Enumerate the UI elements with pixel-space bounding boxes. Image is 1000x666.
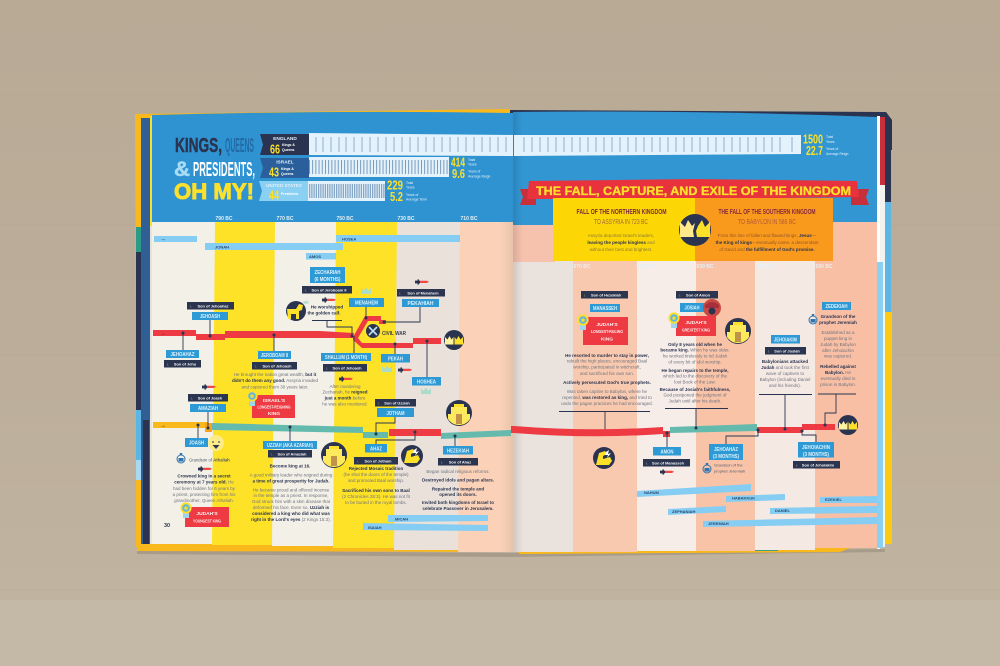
chart: kingdom of Israel timeline: → — [160, 331, 166, 337]
panel: left page timeline columns — [152, 222, 514, 552]
king: Joash: a priest, protecting him from his — [173, 492, 236, 497]
king: Amon — [643, 432, 690, 475]
icon: broken crown circle — [679, 214, 711, 246]
king: Ahaz: (2 Chronicles 28:3). He was not fit — [342, 494, 411, 499]
England totals: 1500 — [803, 132, 823, 146]
England totals — [803, 132, 848, 158]
icon: golden calf circle — [286, 300, 308, 321]
chart: kingdom of Judah timeline, right — [514, 424, 835, 437]
king: Josiah: JOSIAH — [684, 306, 700, 312]
king: Ahaz: Sacrificed his own sons to Baal — [342, 488, 410, 493]
icon: flexed arm, Manasseh — [593, 447, 615, 469]
king: Uzziah: Son of Amaziah — [277, 451, 307, 456]
king: Shallum: After murdering — [329, 384, 361, 389]
Israel reign bar — [309, 157, 449, 177]
Israel stat ribbon: Kings & — [281, 167, 294, 171]
chart: kingdom of Judah timeline, left — [153, 412, 514, 439]
United States term bar — [308, 181, 385, 201]
icon: crowns circle, end of Judah — [838, 415, 858, 435]
United States totals: Years — [406, 186, 415, 190]
king: Manasseh: Son of Hezekiah — [591, 292, 622, 297]
callout: Judah's longest-ruling king — [577, 314, 628, 345]
king: Hezekiah: opened its doors. — [439, 492, 477, 497]
king: Jehoiakim: JEHOIAKIM — [774, 338, 797, 344]
Israel totals: Average Reign — [468, 174, 490, 178]
king: Hezekiah: celebrate Passover in Jerusalem. — [422, 506, 494, 511]
king: Joash: grandmother, Queen Athaliah. — [174, 498, 234, 503]
king: Joash: Grandson of Athaliah — [189, 458, 230, 462]
king: Jehoiakim: ↓ — [768, 348, 770, 354]
king: Amaziah: AMAZIAH — [198, 406, 218, 412]
chart: prophet bars bottom left: MICAH — [395, 516, 408, 522]
king: Shallum: ↓ — [326, 366, 328, 370]
king: Zedekiah: Established as a — [821, 330, 855, 335]
callout: Judah's youngest king: YOUNGEST KING — [193, 518, 221, 524]
panel: fall of the northern kingdom: TO ASSYRIA IN 723 BC — [594, 217, 648, 226]
king: Jehoahaz of Judah: (3 MONTHS) — [713, 454, 739, 460]
king: Ahaz: ↓ — [357, 458, 359, 464]
panel: left page header — [152, 112, 514, 225]
banner: The Fall, Capture, and Exile of the Kingdom: THE FALL, CAPTURE, AND EXILE OF THE KINGDOM — [536, 184, 851, 198]
king: Ahaz: and promoted Baal worship. — [348, 478, 404, 483]
king: Zedekiah: puppet king in — [824, 336, 853, 341]
text: Josiah: Judah until after his death. — [669, 398, 721, 404]
chart: prophet bars top left: → — [160, 237, 166, 243]
England bar continued — [514, 135, 801, 156]
Israel totals — [451, 156, 490, 181]
panel: fall of the southern kingdom: TO BABYLON IN 586 BC — [738, 217, 796, 226]
left page years axis: 710 BC — [461, 216, 478, 222]
icon: civil war — [366, 324, 406, 338]
king: Jehoash of Israel: JEHOASH — [200, 314, 220, 320]
England totals: Years of — [826, 147, 838, 151]
king: Amon: ↓ — [646, 460, 648, 466]
right page years axis: 630 BC — [697, 264, 714, 270]
king: Hezekiah: ↓ — [441, 460, 443, 464]
chart: prophet bars top left: HOSEA — [342, 236, 356, 242]
callout: Judah's longest-ruling king: KING — [601, 336, 613, 342]
king: Hoshea — [412, 340, 441, 394]
England totals: Average Reign — [826, 152, 848, 156]
king: Zedekiah: ZEDEKIAH — [826, 304, 848, 310]
England stat ribbon: 66 — [270, 142, 280, 156]
England stat ribbon: Kings & — [282, 143, 295, 147]
text: Josiah: Only 8 years old when he — [668, 342, 722, 347]
king: Jehoash of Israel — [187, 302, 234, 338]
king: Jehoahaz of Israel: Son of Jehu — [174, 361, 197, 366]
icon: civil war: CIVIL WAR — [382, 331, 406, 337]
chart: kingdom of Israel timeline — [153, 316, 441, 348]
king: Pekah: PEKAH — [388, 356, 403, 362]
text: Manasseh: Was taken captive to Babylon, where he — [567, 389, 648, 394]
king: Hoshea: HOSHEA — [417, 380, 437, 386]
text: Manasseh: repented, was restored as king, and tried to — [562, 395, 652, 400]
king: Jehoiakim: wave of captives to — [766, 371, 805, 376]
England stat ribbon — [260, 134, 309, 156]
king: Ahaz: Rejected Mosaic tradition — [349, 466, 404, 471]
chart: prophet bars bottom right — [637, 484, 877, 527]
left page years axis: 730 BC — [398, 216, 415, 222]
text: Josiah: of every bit of idol worship. — [668, 360, 722, 364]
Israel stat ribbon: 43 — [269, 166, 279, 180]
king: Jehoiachin: Son of Jehoiakim — [802, 462, 835, 467]
king: Zedekiah: was captured. — [824, 354, 852, 358]
England stat ribbon: ENGLAND — [273, 136, 297, 142]
king: Jehoiakim: Babylonians attacked — [762, 359, 808, 364]
United States totals — [387, 178, 427, 204]
king: Amon: AMON — [660, 450, 674, 456]
king: Joash: had been hidden for 6 years by — [173, 486, 236, 491]
title: Kings, Queens & Presidents, Oh My!: OH MY! — [174, 179, 254, 204]
text: Manasseh: He resorted to murder to stay in power, — [565, 353, 649, 358]
king: Jotham — [374, 399, 416, 436]
king: Zechariah: Son of Jeroboam II — [311, 287, 347, 292]
panel: fall of the northern kingdom: leaving the people kingless and — [587, 240, 655, 245]
king: Shallum: Zechariah, he reigned — [322, 390, 368, 394]
Israel totals: Years — [468, 162, 477, 166]
chart: prophet bars top left: AMOS — [309, 254, 321, 259]
callout: Judah's longest-ruling king: JUDAH'S — [596, 322, 618, 328]
king: Jehoash of Israel: Son of Jehoahaz — [198, 303, 229, 308]
icon: temple, Jotham — [446, 400, 472, 426]
England totals: Total — [826, 135, 833, 139]
text: Josiah: He began repairs to the temple, — [661, 368, 729, 373]
icon: dagger near Zechariah — [322, 297, 336, 303]
king: Uzziah: A good military leader who reigned during — [250, 472, 333, 478]
king: Jotham: ↓ — [378, 400, 380, 406]
king: Jotham: JOTHAM — [386, 411, 405, 417]
chart: prophet bars top left: JONAH — [215, 244, 229, 250]
text: Josiah: which led to the discovery of the — [663, 374, 728, 378]
king: Jeroboam II: didn't do them any good. Assyria invaded — [232, 378, 319, 383]
king: Jeroboam II: and captured them 30 years later. — [241, 384, 309, 390]
king: Josiah — [676, 291, 721, 317]
right page years axis: 650 BC — [637, 264, 654, 270]
king: Manasseh: MANASSEH — [593, 306, 617, 312]
king: Uzziah: He became proud and offered incense — [253, 488, 330, 492]
king: Jehoiachin — [793, 430, 840, 468]
chart: prophet bars bottom right: DANIEL — [775, 508, 790, 513]
callout: Judah's longest-ruling king: LONGEST-RULING — [591, 329, 623, 335]
right page years axis: 670 BC — [574, 264, 591, 270]
chart: prophet bars bottom left — [363, 515, 488, 531]
king: Uzziah: UZZIAH (AKA AZARIAH) — [267, 443, 313, 449]
king: Jehoahaz of Israel — [164, 332, 201, 368]
king: Zedekiah: after Jehoiachin — [822, 348, 854, 353]
icon: crowns circle, end of Israel — [444, 330, 464, 350]
king: Jehoiakim: Babylon (including Daniel — [760, 377, 810, 382]
left page years axis: 790 BC — [216, 216, 233, 222]
king: Shallum: SHALLUM (1 MONTH) — [325, 355, 367, 361]
text: Josiah: lost Book of the Law. — [674, 380, 716, 384]
United States totals: Years of — [406, 193, 418, 197]
callout: Israel's longest-reigning king: LONGEST-REIGNING — [258, 404, 291, 410]
king: Joash: ceremony at 7 years old. He — [174, 480, 234, 484]
king: Menahem: MENAHEM — [355, 301, 378, 307]
king: Zechariah — [302, 267, 352, 294]
king: Jeroboam II: ↓ — [255, 364, 257, 368]
chart: prophet bars bottom right: EZEKIEL — [825, 497, 842, 502]
king: Zechariah: ↓ — [305, 288, 307, 292]
king: Ahaz — [342, 430, 416, 505]
king: Zedekiah: prophet Jeremiah — [819, 320, 857, 325]
king: Jehoahaz of Israel: ↓ — [167, 362, 169, 366]
chart: prophet bars bottom right: HABAKKUK — [732, 496, 755, 500]
text: Manasseh: undo the pagan practices he had encouraged. — [561, 401, 653, 406]
chart: prophet bars bottom right: ZEPHANIAH — [672, 509, 695, 514]
panel: left page header: PRESIDENTS, — [193, 159, 255, 181]
king: Jehoahaz of Israel: JEHOAHAZ — [170, 352, 195, 358]
king: Hezekiah: HEZEKIAH — [447, 448, 469, 454]
callout: Israel's longest-reigning king — [246, 390, 295, 418]
callout: Israel's longest-reigning king: ISRAEL'S — [263, 398, 286, 404]
left page years axis: 750 BC — [337, 216, 354, 222]
panel: fall of the northern kingdom: FALL OF THE NORTHERN KINGDOM — [576, 207, 666, 216]
United States totals: 229 — [387, 178, 403, 192]
king: Uzziah — [250, 426, 333, 522]
left page years axis: 770 BC — [277, 216, 294, 222]
text: Josiah: Because of Josiah's faithfulness, — [660, 387, 730, 392]
panel: fall of the northern kingdom: without their best and brightest. — [590, 247, 652, 252]
Israel totals: Years of — [468, 170, 480, 174]
book: covers and page edges — [135, 109, 892, 554]
king: Jehoiachin: ↓ — [796, 462, 798, 468]
text: golden calf: He worshipped — [311, 304, 343, 310]
panel: fall of the southern kingdom: From this line of fallen and flawed kings, Jesus— — [718, 233, 817, 238]
king: Zechariah: (6 MONTHS) — [314, 277, 341, 283]
king: Jotham: Son of Uzziah — [384, 400, 410, 405]
king: Jehoiachin: (3 MONTHS) — [803, 452, 829, 458]
callout: Judah's greatest king — [668, 312, 716, 336]
king: Ahaz: (he shut the doors of the temple) — [343, 472, 409, 477]
callout: Israel's longest-reigning king: KING — [268, 411, 280, 417]
king: Jehoiachin: JEHOIACHIN — [802, 445, 830, 451]
king: Pekahiah: Son of Menahem — [407, 290, 439, 295]
king: Shallum — [321, 336, 371, 406]
United States totals: Average Term — [406, 198, 427, 202]
king: Zedekiah: Grandson of the — [821, 314, 856, 319]
king: Zedekiah: eventually died in — [821, 376, 856, 381]
king: Hezekiah: Son of Ahaz — [449, 459, 471, 464]
title: Kings, Queens & Presidents, Oh My!: & — [174, 158, 190, 181]
king: Uzziah: God struck him with a skin disease that — [252, 499, 331, 504]
king: Jehoiakim: Judah and took the first — [761, 365, 810, 370]
panel: fall of the southern kingdom: the King of kings—eventually came, a descendant — [715, 240, 819, 245]
king: Joash — [173, 424, 236, 503]
panel: left page header: QUEENS — [225, 135, 254, 157]
text: Josiah — [660, 342, 730, 430]
king: Pekahiah: PEKAHIAH — [408, 301, 434, 307]
Israel stat ribbon: ISRAEL — [276, 160, 294, 166]
king: Jehoahaz of Judah — [703, 428, 760, 474]
chart: prophet bars bottom right: NAHUM — [644, 490, 660, 495]
king: Hezekiah: Repaired the temple and — [432, 486, 484, 492]
United States stat ribbon: UNITED STATES — [266, 183, 302, 188]
king: Manasseh — [581, 291, 628, 312]
king: Hezekiah: Invited both kingdoms of Israel to — [422, 500, 494, 505]
United States totals: 5.2 — [390, 190, 403, 204]
chart: prophet bars bottom left: ISAIAH — [368, 525, 382, 530]
icon: temple, Uzziah — [321, 442, 347, 468]
king: Uzziah: a time of great prosperity for Judah. — [252, 478, 330, 484]
callout: Judah's youngest king: JUDAH'S — [196, 511, 218, 517]
text: golden calf — [307, 304, 354, 338]
right page years axis: 590 BC — [816, 264, 833, 270]
icon: temple, Josiah — [725, 318, 751, 344]
king: Pekahiah — [382, 279, 445, 324]
panel: fall of the northern kingdom — [553, 198, 695, 261]
king: Jehoiakim: and his friends). — [769, 383, 801, 388]
king: Shallum: he was also murdered. — [322, 402, 368, 406]
Israel totals: 414 — [451, 156, 465, 170]
king: Jeroboam II — [232, 334, 319, 390]
king: Jeroboam II: He brought the nation great wealth, but it — [234, 372, 317, 377]
Israel stat ribbon: Queens — [281, 172, 294, 176]
right page years axis — [574, 264, 833, 270]
icon: flexed arm, Ahaz — [401, 445, 423, 467]
England totals: Years — [826, 140, 835, 144]
panel: fall of the southern kingdom: THE FALL OF THE SOUTHERN KINGDOM — [718, 207, 816, 216]
king: Hezekiah: Began radical religious reforms: — [426, 469, 490, 474]
United States stat ribbon: Presidents — [281, 192, 298, 196]
king: Ahaz: Son of Jotham — [364, 458, 392, 463]
king: Ahaz: to be buried in the royal tombs. — [345, 500, 407, 505]
England stat ribbon: Queens — [282, 148, 295, 152]
king: Jehoahaz of Judah: prophet Jeremiah — [714, 468, 745, 474]
text: Josiah: became king. When he was older, — [660, 348, 730, 352]
king: Pekahiah: ↓ — [399, 290, 401, 296]
title: Kings, Queens & Presidents, Oh My! — [174, 135, 255, 204]
king: Zedekiah: Judah by Babylon — [820, 342, 856, 347]
England reign bar — [309, 133, 514, 156]
king: Joash: JOASH — [189, 441, 204, 447]
king: Amaziah: Son of Joash — [198, 395, 223, 400]
panel: right page background — [513, 112, 877, 552]
panel: fall of the southern kingdom — [695, 198, 833, 261]
callout: Judah's greatest king: JUDAH'S — [685, 320, 707, 326]
right page years axis: 610 BC — [757, 264, 774, 270]
king: Zedekiah: Babylon. He — [825, 370, 852, 375]
king: Josiah: Son of Amon — [686, 292, 711, 297]
king: Shallum: Son of Jehoash — [333, 365, 362, 370]
king: Zedekiah: Rebelled against — [820, 364, 856, 369]
Israel totals: Total — [468, 158, 475, 162]
text: Josiah: God postponed the judgment of — [663, 392, 727, 398]
king: Pekah — [381, 342, 412, 373]
king: Hezekiah — [422, 434, 494, 511]
left page years axis — [216, 216, 478, 222]
king: Amon: Son of Manasseh — [652, 460, 685, 465]
panel: fall of the northern kingdom: Assyria deported Israel's leaders, — [588, 233, 654, 238]
king: Jehoash of Israel: ↓ — [190, 304, 192, 308]
page number: 30 — [164, 523, 170, 529]
king: Joash: Crowned king in a secret — [177, 474, 231, 478]
king: Zechariah: ZECHARIAH — [314, 270, 340, 276]
chart: prophet bars top left — [154, 235, 460, 260]
king: Uzziah: ↓ — [271, 452, 273, 456]
text: Manasseh: Actively persecuted God's true prophets. — [563, 380, 651, 385]
text: Manasseh — [559, 353, 653, 434]
Israel totals: 9.6 — [452, 167, 465, 181]
callout: Judah's youngest king — [180, 502, 229, 527]
panel: fall of the southern kingdom: of David and the fulfillment of God's promise. — [719, 247, 815, 252]
text: Manasseh: and sacrificed his own son. — [580, 371, 634, 376]
king: Ahaz: AHAZ — [370, 446, 382, 452]
England totals: 22.7 — [806, 144, 823, 158]
king: Zedekiah: prison in Babylon. — [820, 382, 856, 387]
king: Jehoiakim — [759, 335, 812, 430]
king: Jeroboam II: JEROBOAM II — [261, 353, 288, 359]
chart: kingdom of Judah timeline, left: → — [160, 423, 166, 429]
United States totals: Total — [406, 181, 413, 185]
text: Manasseh: rebuilt the high places, encouraged Baal — [567, 358, 647, 364]
king: Menahem — [349, 288, 384, 320]
United States stat ribbon: 44 — [269, 188, 279, 202]
king: Uzziah: in the temple as a priest. In response, — [253, 493, 329, 498]
king: Uzziah: considered a king who did what was — [252, 511, 330, 516]
title: Kings, Queens & Presidents, Oh My!: KINGS, — [175, 135, 222, 157]
king: Josiah: ↓ — [679, 292, 681, 298]
king: Manasseh: ↓ — [584, 292, 586, 298]
king: Zedekiah — [809, 302, 857, 426]
United States stat ribbon — [259, 181, 308, 202]
king: Amaziah — [188, 384, 228, 412]
king: Uzziah: deformed his face. Even so, Uzziah is — [253, 505, 330, 510]
king: Jehoiakim: Son of Josiah — [774, 348, 800, 353]
king: Jehoahaz of Judah: Grandson of the — [714, 462, 743, 468]
chart: prophet bars bottom right: JEREMIAH — [708, 521, 729, 526]
text: Manasseh: worship, participated in witchcraft, — [573, 364, 641, 370]
text: golden calf: the golden calf. — [307, 310, 341, 316]
king: Uzziah: right in the Lord's eyes (2 Kings 15:3). — [251, 517, 331, 522]
king: Hezekiah: Destroyed idols and pagan altars. — [422, 478, 494, 482]
king: Uzziah: Become king at 16. — [270, 464, 310, 468]
callout: Judah's greatest king: GREATEST KING — [682, 328, 710, 334]
king: Shallum: just a month before — [324, 396, 366, 400]
king: Jeroboam II: Son of Jehoash — [263, 363, 292, 368]
king: Amaziah: ↓ — [191, 396, 193, 400]
Israel stat ribbon — [260, 158, 309, 180]
king: Jehoahaz of Judah: JEHOAHAZ — [714, 447, 738, 453]
banner: The Fall, Capture, and Exile of the Kingdom — [520, 179, 869, 205]
text: Josiah: he worked tirelessly to rid Judah — [663, 354, 728, 358]
